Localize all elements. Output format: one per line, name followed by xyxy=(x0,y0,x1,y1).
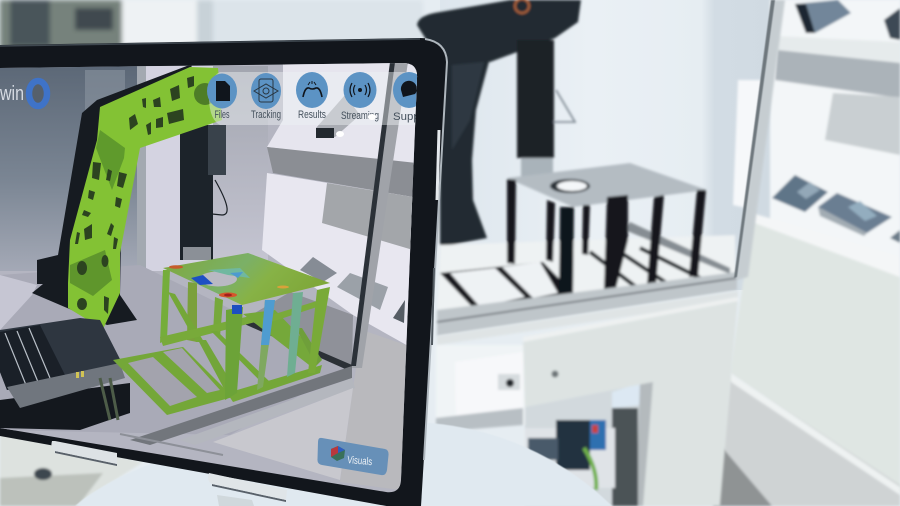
right wall display shelves xyxy=(730,0,900,493)
metal frame rungs at back xyxy=(590,248,700,290)
logo wordmark with ring: win xyxy=(0,83,24,105)
real arm seen through screen xyxy=(180,125,213,260)
edge buttons of tablet xyxy=(432,268,434,345)
lower left floor behind the tablet xyxy=(0,430,143,506)
visuals button: Visuals xyxy=(347,454,373,468)
menu icon: Streaming xyxy=(341,72,379,122)
frame bottom plate xyxy=(113,347,233,415)
menu icon: Results xyxy=(296,72,328,121)
cabinet window with electronics xyxy=(525,382,653,506)
mesh cut-outs xyxy=(75,76,194,314)
back wall of robot cell xyxy=(440,0,775,290)
metal frame bottom plate xyxy=(440,262,573,312)
white display wall xyxy=(267,62,418,165)
dark glass on left xyxy=(0,66,140,271)
black shadow base of robot xyxy=(32,64,192,325)
AR menu band xyxy=(209,72,418,125)
heat sink modules xyxy=(772,175,828,212)
menu icon: Support: Support xyxy=(393,111,433,123)
logo wordmark with ring xyxy=(0,81,47,106)
upper left blurred background xyxy=(0,0,423,50)
robot cell glass, arm and frame xyxy=(417,0,737,336)
back rail xyxy=(625,222,730,274)
window frame post xyxy=(736,0,785,280)
controller box on floor xyxy=(0,318,130,430)
real robot arm xyxy=(417,0,581,62)
menu icon: Tracking: Tracking xyxy=(251,109,281,121)
frame top plate xyxy=(163,253,330,305)
control cabinet and door xyxy=(436,291,738,506)
glass reflection near the cell post xyxy=(733,80,762,210)
display heat sinks xyxy=(300,257,337,282)
background shelf object xyxy=(316,95,360,137)
metal frame legs xyxy=(507,179,516,264)
interior floor xyxy=(437,235,736,322)
AR inspection frame with deviation colour map xyxy=(113,253,330,415)
menu icon: Results: Results xyxy=(298,109,326,121)
tablet device xyxy=(0,38,447,506)
round white table xyxy=(75,422,612,506)
menu icon: Files xyxy=(207,74,237,121)
frame back and side struts xyxy=(160,270,170,343)
AR robot arm mesh, green xyxy=(68,67,222,329)
cell rail bottom xyxy=(130,366,352,445)
metal frame top plate xyxy=(507,163,707,207)
tablet body and bezel xyxy=(0,38,447,506)
menu icon: Files: Files xyxy=(214,109,230,121)
frame legs with colour map xyxy=(225,307,243,400)
lower cabinet face xyxy=(730,220,900,493)
vertical glass post xyxy=(352,62,408,368)
cell base rail xyxy=(437,272,737,336)
visuals button xyxy=(317,438,389,475)
floor xyxy=(713,373,900,506)
grey cell floor xyxy=(0,265,350,435)
tablet stand clips and stem xyxy=(51,441,287,506)
tablet screen: AR camera view xyxy=(0,60,433,500)
glare dots on screen xyxy=(336,131,344,137)
right beige floor beyond rail xyxy=(397,345,406,490)
menu icon: Support xyxy=(393,72,418,122)
lavender back wall xyxy=(146,66,216,271)
menu icon: Tracking xyxy=(251,73,281,121)
menu icon: Streaming: Streaming xyxy=(341,110,379,122)
shelf objects top xyxy=(795,0,851,33)
